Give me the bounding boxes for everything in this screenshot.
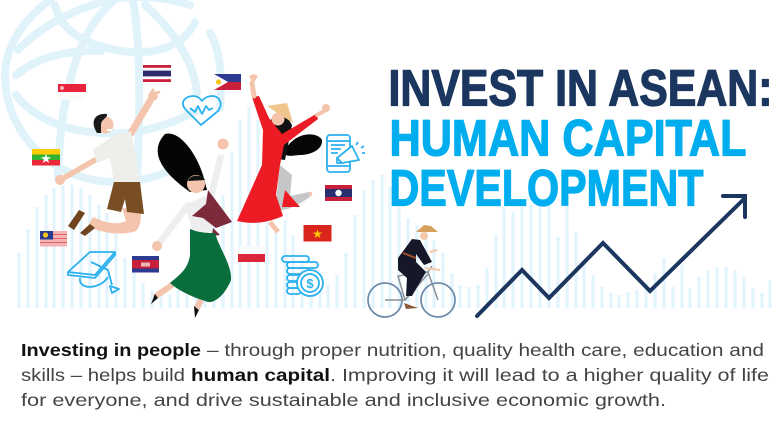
man jumping — [55, 89, 160, 236]
icon: coins with dollar — [282, 256, 323, 296]
woman in green skirt — [151, 133, 232, 318]
intro paragraph: for everyone, and drive sustainable and inclusive economic growth. — [21, 390, 666, 410]
title — [388, 60, 772, 216]
woman in red dress — [237, 74, 330, 232]
cyclist — [368, 225, 455, 317]
intro paragraph: . Improving it will lead to a higher quality of life — [330, 365, 769, 385]
intro paragraph — [21, 340, 769, 410]
intro paragraph: human capital — [191, 365, 330, 385]
flag: Cambodia — [132, 256, 159, 272]
flag: Vietnam — [304, 225, 332, 242]
intro paragraph: Investing in people — [21, 340, 201, 360]
globe logo watermark — [5, 0, 221, 182]
icon: graduation cap — [68, 252, 119, 293]
flag: Thailand — [143, 65, 171, 82]
flag: Malaysia — [40, 231, 67, 246]
intro paragraph: – through proper nutrition, quality health care, education and — [207, 340, 764, 360]
flag: Laos — [325, 185, 352, 201]
flag: Singapore — [58, 84, 86, 100]
flag: Philippines — [214, 74, 241, 90]
flag: Vietnam: ★ — [312, 227, 323, 241]
icon: heart with pulse — [183, 96, 221, 125]
icon: coins with dollar: $ — [306, 276, 314, 291]
flag: Myanmar — [32, 149, 60, 166]
flag: Myanmar: ★ — [40, 151, 52, 166]
flag: Indonesia — [238, 246, 265, 262]
flags — [32, 65, 352, 272]
icon: phone with megaphone — [327, 135, 365, 172]
intro paragraph: skills – helps build — [21, 365, 185, 385]
title: DEVELOPMENT — [390, 160, 704, 216]
background bar pattern — [19, 107, 770, 308]
rising arrow — [477, 196, 745, 316]
